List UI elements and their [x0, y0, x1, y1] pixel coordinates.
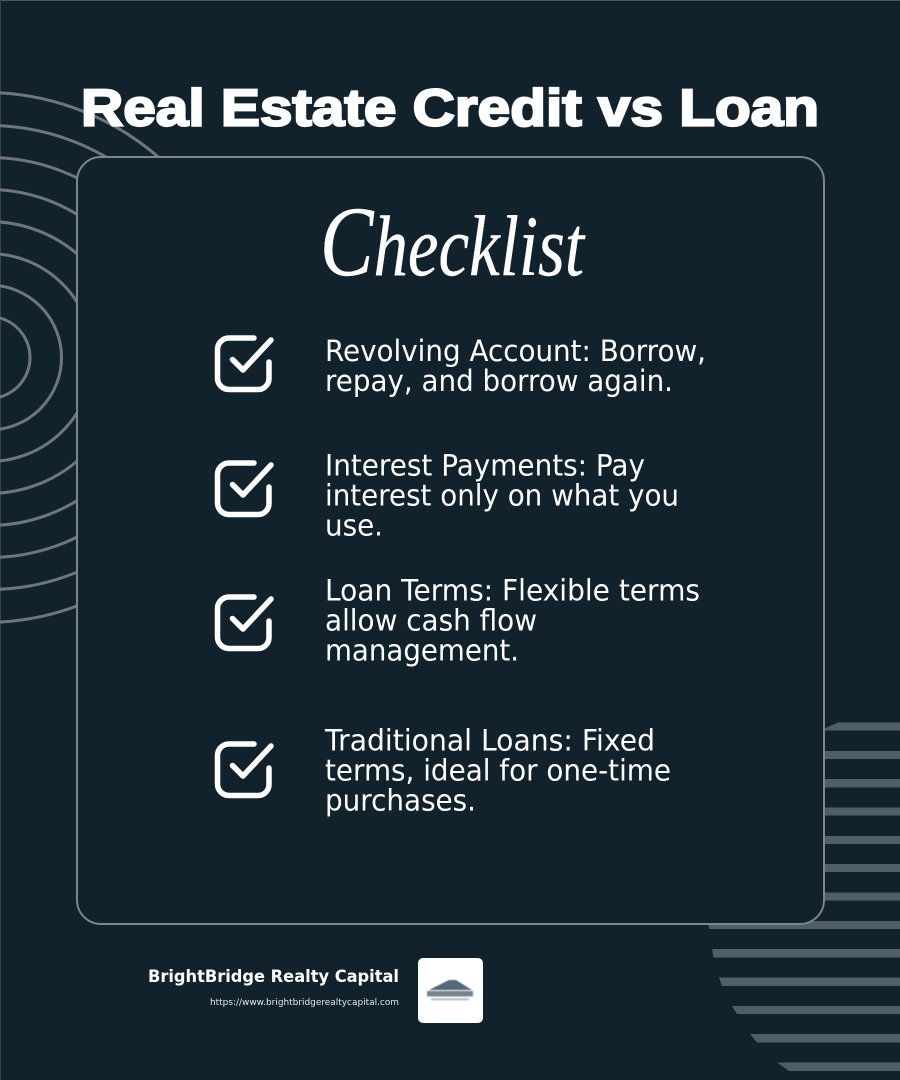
- text: interest payments: Interest Payments: Pay: [325, 448, 645, 482]
- decoration: concentric rings: [0, 92, 250, 622]
- heading: Checklist: Checklist: [320, 186, 586, 297]
- text: traditional loans: Traditional Loans: Fixed: [324, 724, 655, 758]
- panel: checklist: [77, 157, 824, 924]
- text: traditional loans: purchases.: [325, 784, 476, 818]
- decoration: horizontal stripes: [708, 722, 900, 1071]
- icon: checkbox 2: [218, 463, 271, 514]
- text: traditional loans: [324, 724, 671, 818]
- icon: checkbox 3: [218, 597, 271, 648]
- title: Real Estate Credit vs Loan: [81, 80, 819, 138]
- icon: checkbox 1: [218, 338, 271, 390]
- text: interest payments: interest only on what you: [325, 478, 679, 512]
- text: traditional loans: terms, ideal for one-time: [325, 754, 671, 788]
- text: revolving account: Revolving Account: Borrow,: [325, 334, 706, 368]
- text: interest payments: [325, 448, 679, 542]
- text: revolving account: [325, 334, 706, 398]
- panel background: [77, 157, 824, 924]
- text: interest payments: use.: [325, 508, 383, 542]
- text: revolving account: repay, and borrow again.: [325, 364, 673, 398]
- text: loan terms: management.: [325, 634, 519, 668]
- text: loan terms: Loan Terms: Flexible terms: [325, 574, 700, 608]
- logo: [418, 958, 483, 1023]
- footer: website url: https://www.brightbridgerealtycapital.com: [210, 998, 399, 1008]
- footer: company name: BrightBridge Realty Capital: [148, 967, 399, 986]
- text: loan terms: [325, 574, 700, 668]
- text: loan terms: allow cash flow: [325, 604, 537, 638]
- icon: checkbox 4: [218, 744, 271, 796]
